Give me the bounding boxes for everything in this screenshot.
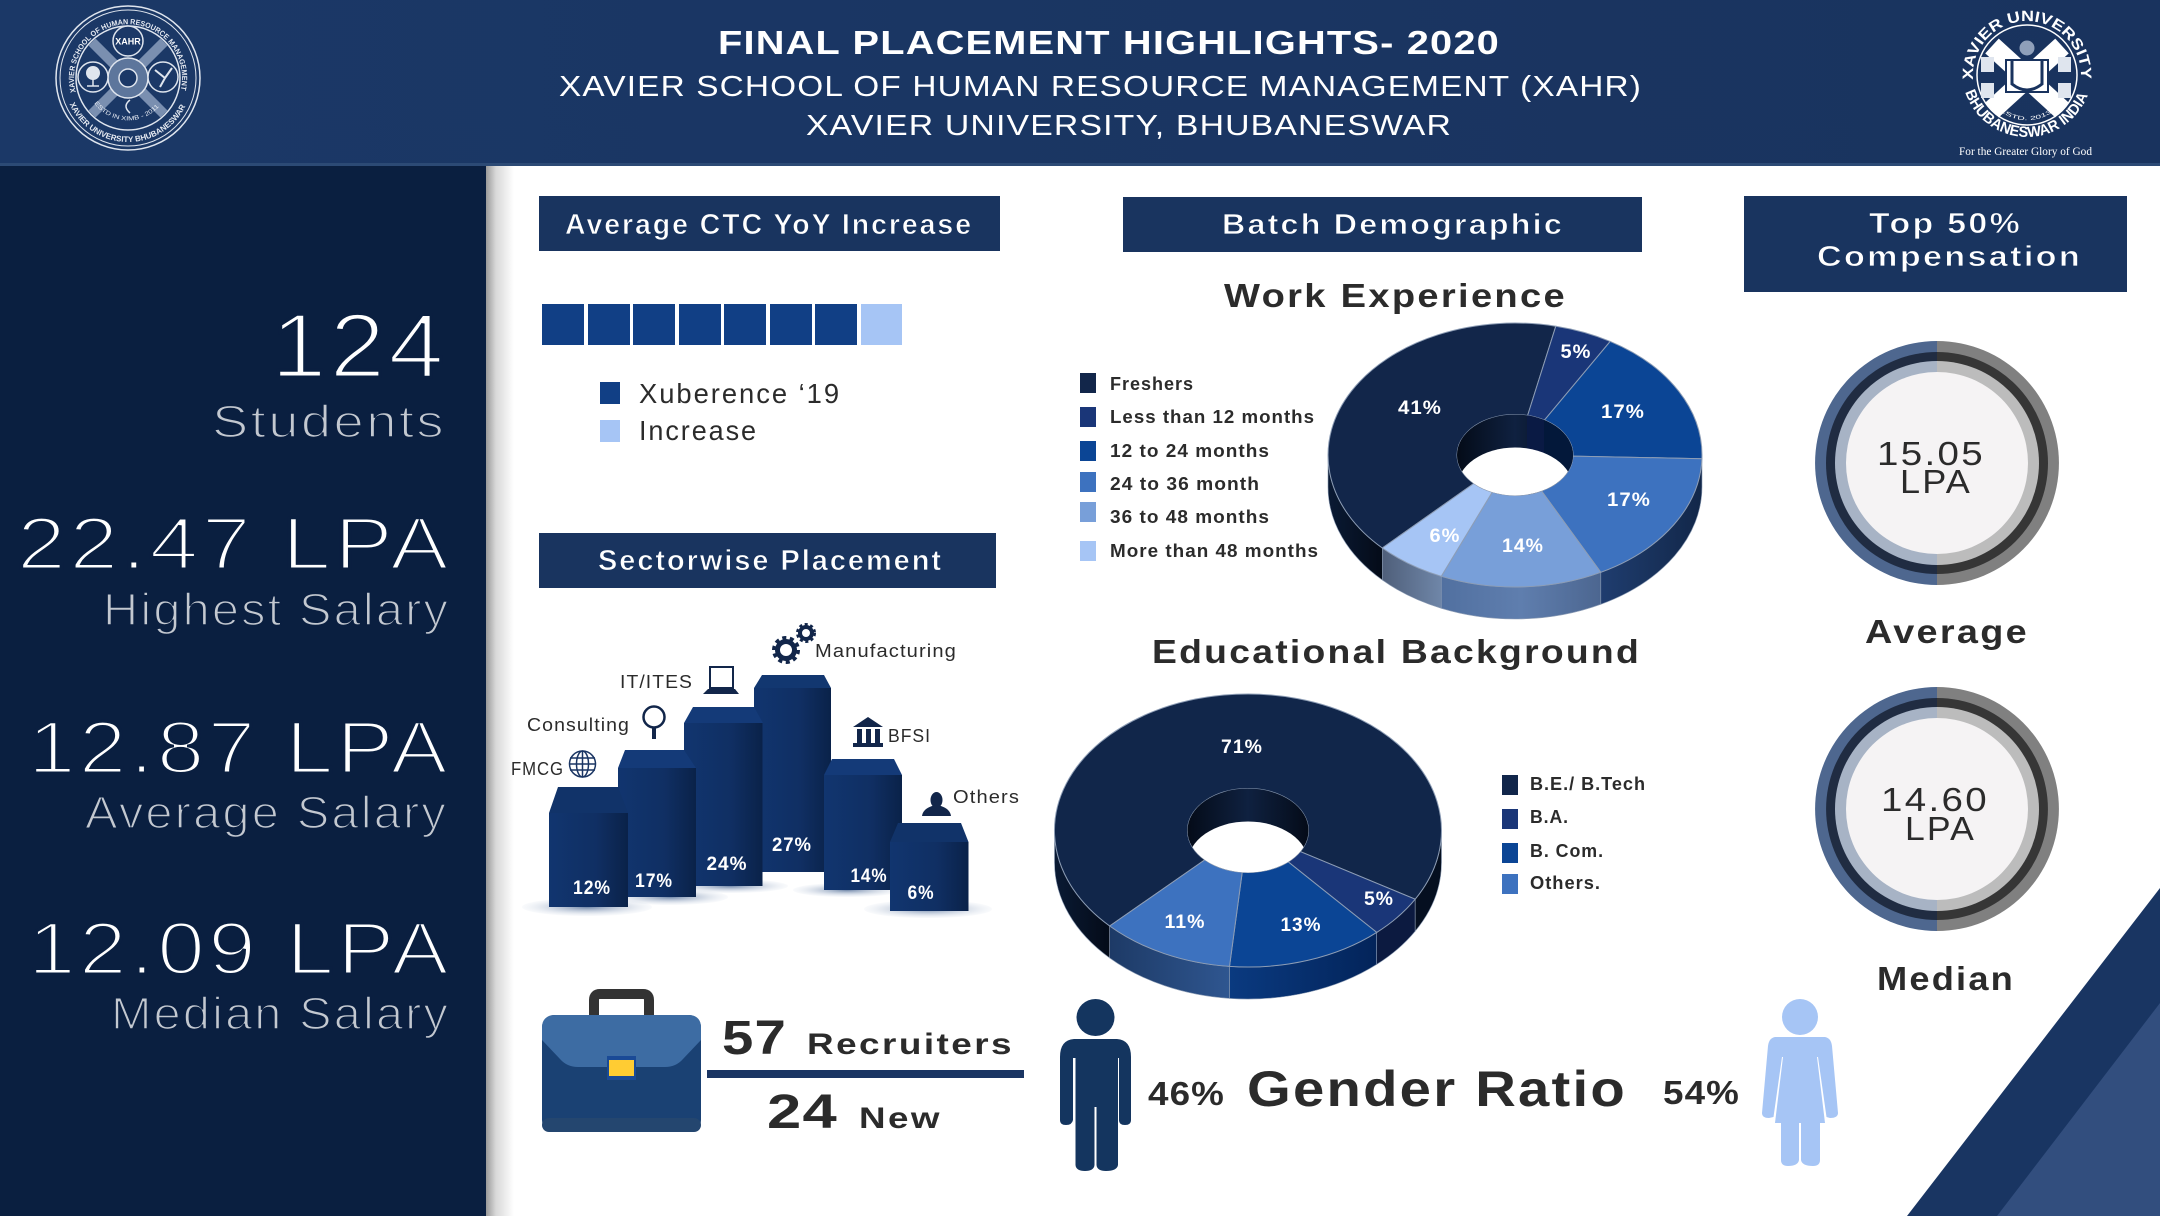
icon: bank [853, 717, 883, 747]
legend: educational background: B. Com. [1530, 840, 1604, 861]
slice: others 11% [1110, 860, 1242, 966]
text: recruiters count: 57 [722, 1012, 787, 1065]
stat: average salary: Average Salary [85, 787, 448, 838]
gauge: average: 15.05 [1877, 435, 1985, 472]
bar: consulting 17% [618, 750, 696, 897]
sector labels: Others [953, 787, 1020, 807]
sector labels [511, 641, 1020, 807]
slice: 36 to 48 months 14% [1441, 491, 1601, 587]
panel: key stats sidebar [0, 166, 486, 1216]
heading: Sectorwise Placement [598, 545, 943, 577]
values: 14% [1502, 536, 1544, 557]
icon: woman [1762, 999, 1838, 1166]
donut chart: work experience [1328, 323, 1702, 619]
slice: less than 12 months 5% [1528, 326, 1610, 420]
donut chart: educational background [1054, 694, 1442, 999]
icon: magnifier [644, 706, 664, 739]
values: 11% [1164, 912, 1206, 933]
stat: median salary [28, 907, 452, 1039]
bar: IT/ITES 24% [684, 707, 763, 886]
bar: manufacturing 27% [754, 675, 831, 872]
bar: FMCG 12% [549, 787, 628, 907]
slice: freshers 41% [1328, 323, 1556, 548]
stat: highest salary [17, 502, 452, 635]
values: 13% [1280, 915, 1322, 936]
sidebar drop shadow [486, 166, 514, 1216]
heading [1123, 197, 1642, 252]
gauge: average [1815, 341, 2059, 585]
header title: XAVIER SCHOOL OF HUMAN RESOURCE MANAGEMENT (XAHR) [559, 71, 1642, 103]
stat: highest salary: 22.47 LPA [17, 502, 452, 585]
legend: work experience: Less than 12 months [1110, 406, 1315, 427]
sector labels: Consulting [527, 715, 630, 735]
values [1164, 737, 1394, 936]
text: gender ratio title: Gender Ratio [1247, 1061, 1627, 1117]
bar values: 27% [772, 835, 812, 856]
stat: students: Students [212, 396, 446, 447]
slice: more than 48 months 6% [1382, 484, 1492, 576]
stat: students: 124 [271, 296, 447, 397]
panel: sectorwise placement [511, 533, 1020, 918]
legend: work experience: More than 48 months [1110, 540, 1319, 561]
unit bar chart [542, 304, 902, 345]
legend: work experience: 24 to 36 month [1110, 473, 1260, 494]
icon: XAHR logo: ESTD IN XIMB - 2011 [94, 101, 159, 120]
heading [539, 533, 996, 588]
text: new recruiters: New [859, 1102, 942, 1135]
bar shadows [522, 879, 992, 918]
gauge: median: LPA [1905, 810, 1976, 847]
stat: average salary: 12.87 LPA [28, 706, 451, 789]
gauge: median: 14.60 [1881, 781, 1989, 818]
slice: 12 to 24 months 17% [1544, 341, 1702, 459]
heading: educational background: Educational Background [1152, 633, 1641, 670]
icon: laptop [703, 667, 739, 694]
text: male share: 46% [1148, 1075, 1225, 1112]
header title [559, 24, 1642, 142]
slice: B.A. 5% [1288, 852, 1415, 932]
stat: median salary: 12.09 LPA [28, 907, 452, 990]
text: female share: 54% [1663, 1074, 1740, 1111]
panel: recruiters [542, 994, 1024, 1139]
slice: B.E./B.Tech 71% [1054, 694, 1441, 926]
header title: FINAL PLACEMENT HIGHLIGHTS- 2020 [718, 24, 1500, 61]
values: 6% [1430, 526, 1460, 547]
bar: BFSI 14% [824, 759, 902, 890]
icon: person [922, 792, 951, 816]
stat: median salary: Median Salary [111, 988, 450, 1039]
slice: 24 to 36 month 17% [1542, 456, 1702, 572]
text: new recruiters [767, 1086, 942, 1139]
gauge: average: LPA [1900, 463, 1972, 500]
panel: gender ratio [1060, 999, 1838, 1171]
gauge: median [1815, 687, 2059, 931]
icon: XAHR logo: XAVIER SCHOOL OF HUMAN RESOURCE MANAGEMENT [68, 19, 188, 93]
heading: Average CTC YoY Increase [565, 209, 973, 241]
panel: top 50% compensation [1744, 196, 2127, 997]
label: median: Median [1877, 960, 2015, 997]
bar values: 6% [908, 883, 934, 904]
icon: XAHR logo: XAVIER UNIVERSITY BHUBANESWAR [70, 102, 186, 142]
heading [1744, 196, 2127, 292]
bar values: 14% [850, 866, 888, 887]
legend [600, 378, 841, 446]
bar values: 12% [573, 878, 611, 899]
values: 71% [1221, 737, 1263, 758]
legend: educational background: B.E./ B.Tech [1530, 773, 1646, 794]
icon: man [1060, 999, 1131, 1171]
heading: work experience: Work Experience [1224, 277, 1567, 314]
stat: students [212, 296, 447, 447]
corner triangle decoration [1907, 888, 2160, 1216]
legend: work experience [1080, 373, 1319, 561]
icon: Xavier University logo: ESTD. 2013 [2003, 110, 2051, 120]
values: 41% [1398, 398, 1442, 419]
icon: Xavier University logo: XAVIER UNIVERSITY [1962, 10, 2092, 80]
values [1398, 342, 1651, 557]
sector labels: BFSI [888, 726, 931, 746]
icon: gears [774, 624, 814, 662]
slice: B. Com. 13% [1230, 862, 1377, 967]
icon: XAHR logo: XAHR [115, 36, 141, 46]
values: 5% [1364, 889, 1394, 910]
stat: average salary [28, 706, 451, 838]
values: 17% [1607, 490, 1651, 511]
icon: XAHR logo [55, 5, 201, 151]
outer wall [1328, 455, 1702, 619]
header title: XAVIER UNIVERSITY, BHUBANESWAR [806, 110, 1452, 142]
legend: educational background [1502, 773, 1646, 894]
bar values [573, 835, 934, 904]
sector labels: FMCG [511, 759, 564, 779]
icon: Xavier University logo: For the Greater Glory of God [1959, 146, 2092, 158]
icon: Xavier University logo: BHUBANESWAR INDIA [1965, 89, 2088, 137]
legend: work experience: Freshers [1110, 373, 1194, 394]
panel: batch demographic [1054, 197, 1702, 999]
bar values: 24% [706, 854, 748, 875]
sector labels: IT/ITES [620, 672, 693, 692]
legend: Xuberence ‘19 [639, 378, 841, 409]
text: new recruiters: 24 [767, 1086, 838, 1139]
values: 5% [1560, 342, 1592, 363]
icon: Xavier University logo [1959, 10, 2092, 158]
heading [539, 196, 1000, 251]
heading: Top 50% [1869, 208, 2022, 240]
donut hole [1457, 414, 1573, 496]
text: recruiters count: Recruiters [807, 1028, 1014, 1061]
panel: average CTC increase [539, 196, 1000, 446]
icon: briefcase [542, 994, 701, 1132]
heading: Compensation [1817, 241, 2082, 273]
bar: others 6% [890, 823, 968, 911]
header band [0, 0, 2160, 166]
heading: Batch Demographic [1222, 209, 1564, 241]
legend: Increase [639, 415, 758, 446]
legend: work experience: 12 to 24 months [1110, 440, 1270, 461]
stat: highest salary: Highest Salary [103, 584, 450, 635]
legend: educational background: Others. [1530, 872, 1601, 893]
icon: globe [570, 751, 596, 777]
outer wall [1054, 830, 1442, 999]
legend: work experience: 36 to 48 months [1110, 506, 1270, 527]
text: recruiters count [722, 1012, 1014, 1065]
donut hole [1188, 788, 1308, 872]
values: 17% [1601, 402, 1645, 423]
bar values: 17% [635, 871, 673, 892]
sector labels: Manufacturing [815, 641, 957, 661]
legend: educational background: B.A. [1530, 806, 1569, 827]
label: average: Average [1865, 613, 2029, 650]
